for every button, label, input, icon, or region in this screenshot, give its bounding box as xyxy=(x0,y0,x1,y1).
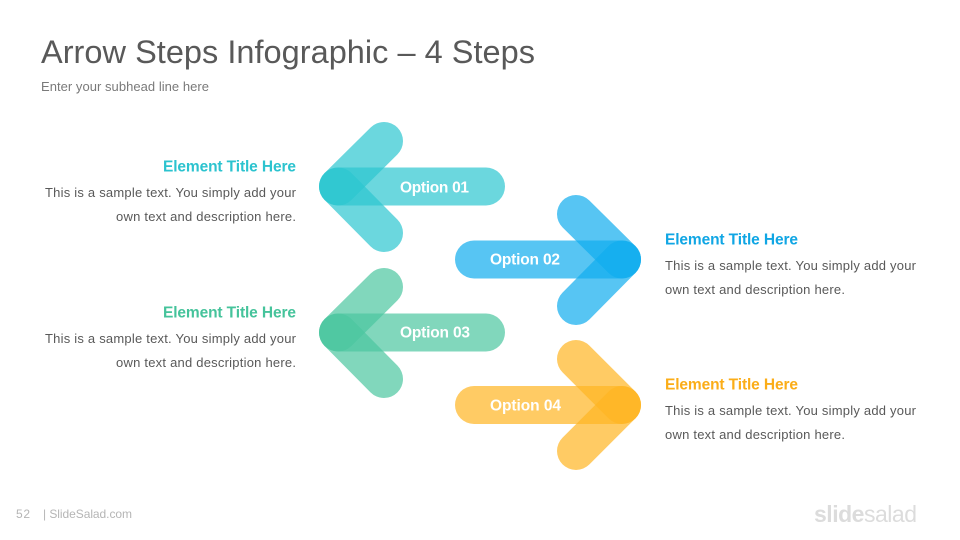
arrow 1: teal pointing left xyxy=(338,141,486,233)
text block 1: This is a sample text. You simply add your xyxy=(45,185,297,200)
arrow 3: green pointing left xyxy=(338,287,486,379)
text block 4: Element Title Here xyxy=(665,376,798,394)
subhead: Enter your subhead line here xyxy=(41,79,209,94)
text block 4: own text and description here. xyxy=(665,427,845,442)
footer logo wordmark: slidesalad xyxy=(814,501,917,527)
arrow 4: yellow pointing right xyxy=(474,359,622,451)
text block 3 xyxy=(45,304,297,370)
footer page number: 52 xyxy=(16,507,30,521)
text block 2: This is a sample text. You simply add your xyxy=(665,258,917,273)
text block 4 xyxy=(665,376,917,442)
text block 3: own text and description here. xyxy=(116,355,296,370)
title: Arrow Steps Infographic – 4 Steps xyxy=(41,34,535,70)
arrow 2: blue pointing right xyxy=(474,214,622,306)
text block 3: Element Title Here xyxy=(163,304,296,322)
arrow 2 label: Option 02 xyxy=(490,252,560,268)
text block 1 xyxy=(45,158,297,224)
arrow 4 label: Option 04 xyxy=(490,398,561,414)
arrow 1 label: Option 01 xyxy=(400,180,469,196)
text block 3: This is a sample text. You simply add your xyxy=(45,331,297,346)
text block 2: own text and description here. xyxy=(665,282,845,297)
text block 1: own text and description here. xyxy=(116,209,296,224)
text block 2: Element Title Here xyxy=(665,232,798,248)
text block 2 xyxy=(665,232,917,297)
footer source: | SlideSalad.com xyxy=(43,507,132,521)
arrow 3 label: Option 03 xyxy=(400,324,470,342)
text block 1: Element Title Here xyxy=(163,158,296,176)
text block 4: This is a sample text. You simply add your xyxy=(665,403,917,418)
